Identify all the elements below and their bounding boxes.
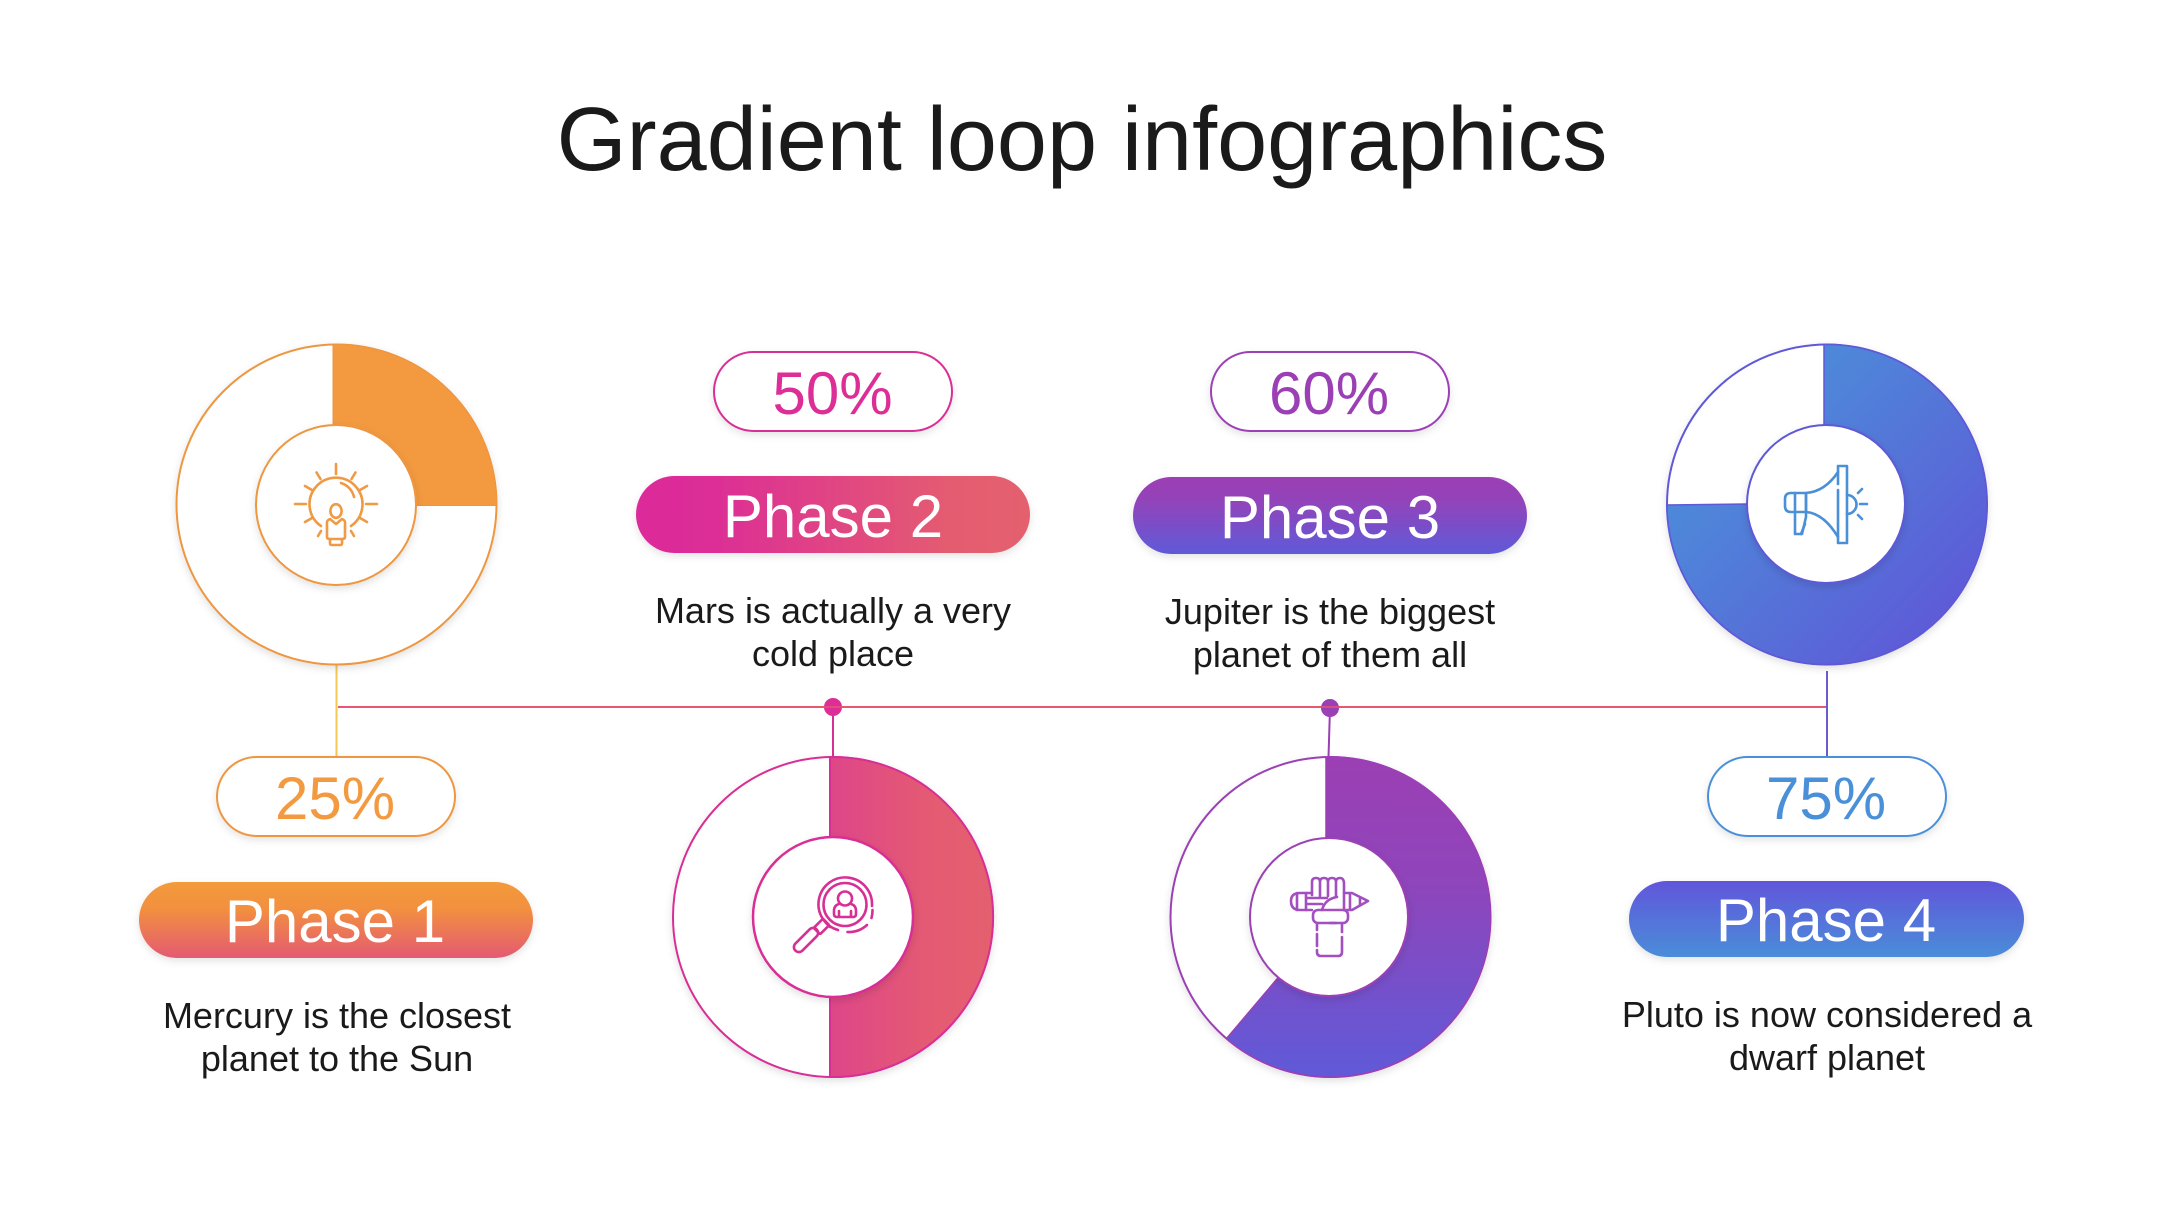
text: phase 4 description: dwarf planet [1729,1037,1925,1078]
panel: phase 4 [1622,344,2033,1078]
connector: phase 4 stem [1826,671,1828,757]
label pill: Phase 4 [1629,881,2024,957]
icon: light bulb with person [295,464,377,545]
label pill: Phase 1: Phase 1 [225,888,445,955]
percentage pill: 25%: 25% [275,765,395,832]
donut chart: 25% [176,344,497,664]
icon: fist holding pencil [1291,878,1368,956]
connector: phase 3 dot and stem [1321,699,1339,757]
text: phase 1 description: Mercury is the closest [163,995,511,1036]
label pill: Phase 2 [636,476,1030,553]
label pill: Phase 3: Phase 3 [1220,484,1440,551]
donut chart: 75% [1667,344,1987,665]
percentage pill: 50%: 50% [772,360,893,427]
text: phase 3 description: Jupiter is the biggest [1165,591,1495,632]
icon: magnifier with person [792,877,873,954]
title: Gradient loop infographics [557,90,1607,190]
percentage pill: 60% [1211,352,1449,431]
label pill: Phase 4: Phase 4 [1716,887,1936,954]
panel: phase 2 [636,352,1030,1077]
connector: horizontal timeline [338,706,1827,708]
percentage pill: 75%: 75% [1766,765,1886,832]
label pill: Phase 3 [1133,477,1527,554]
text: phase 2 description: Mars is actually a very [655,590,1011,631]
panel: phase 1 [139,344,533,1079]
connector: phase 2 dot and stem [824,698,842,757]
panel: phase 3 [1133,352,1527,1077]
text: phase 1 description: planet to the Sun [201,1038,473,1079]
label pill: Phase 1 [139,882,533,958]
donut chart: 50% [673,757,993,1077]
percentage pill: 50% [714,352,952,431]
percentage pill: 60%: 60% [1269,360,1389,427]
percentage pill: 25% [217,757,455,836]
text: phase 2 description: cold place [752,633,914,674]
text: phase 3 description: planet of them all [1193,634,1467,675]
text: phase 4 description: Pluto is now considered a [1622,994,2033,1035]
donut chart: 60% [1170,757,1490,1077]
label pill: Phase 2: Phase 2 [723,483,943,550]
icon: megaphone [1785,466,1867,543]
connector: phase 1 stem [336,664,338,757]
percentage pill: 75% [1708,757,1946,836]
